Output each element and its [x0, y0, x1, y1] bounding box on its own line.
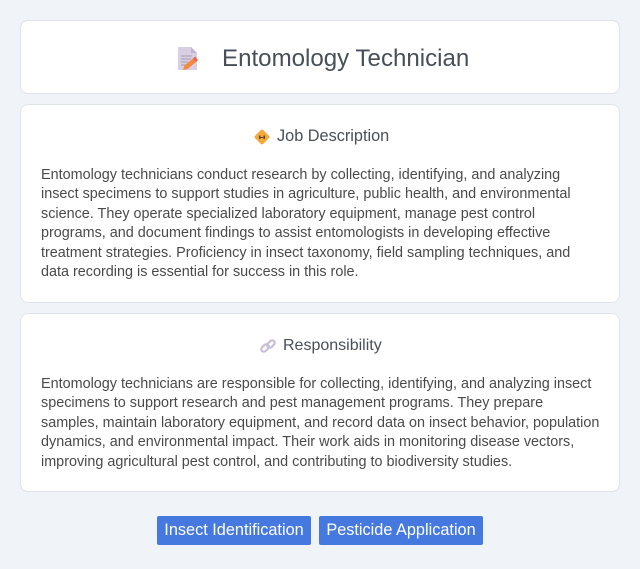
button: Pesticide Application — [319, 516, 483, 545]
panel: responsibility: specimens to support research and pest management programs. They prepare — [41, 395, 543, 411]
panel: job description: treatment strategies. Proficiency in insect taxonomy, field sampling techniques, and — [41, 245, 570, 261]
panel: responsibility: improving agricultural pest control, and contributing to biodiversity studies. — [41, 454, 512, 470]
panel: responsibility: samples, maintain laboratory equipment, and record data on insect behavior, population — [41, 415, 599, 431]
button: Pesticide Application: Pesticide Application — [326, 521, 476, 539]
heading: Entomology Technician: Entomology Technician — [222, 45, 469, 72]
icon: construction diamond — [254, 130, 270, 144]
heading: Responsibility: Responsibility — [283, 337, 382, 354]
panel: job description: insect specimens to support studies in agriculture, public health, and environmental — [41, 186, 571, 202]
panel: job description: science. They operate specialized laboratory equipment, manage pest control — [41, 206, 535, 222]
heading: Job Description: Job Description — [277, 127, 389, 145]
button: Insect Identification: Insect Identification — [164, 521, 304, 539]
icon: memo with pencil — [178, 47, 198, 70]
panel: responsibility: dynamics, and environmental impact. Their work aids in monitoring disease vectors, — [41, 434, 574, 450]
icon: link — [260, 339, 276, 353]
panel: job description: programs, and document findings to assist entomologists in developing effective — [41, 225, 550, 241]
text: responsibility body — [41, 376, 599, 470]
panel: responsibility — [20, 313, 620, 492]
panel: job description: Entomology technicians conduct research by collecting, identifying, and analyzing — [41, 167, 560, 183]
button: Insect Identification — [157, 516, 311, 545]
panel: job description: data recording is essential for success in this role. — [41, 264, 359, 280]
text: job description body — [41, 167, 571, 280]
panel: responsibility: Entomology technicians are responsible for collecting, identifying, and analyzing insect — [41, 376, 591, 392]
panel: title — [20, 20, 620, 94]
panel: job description — [20, 104, 620, 303]
